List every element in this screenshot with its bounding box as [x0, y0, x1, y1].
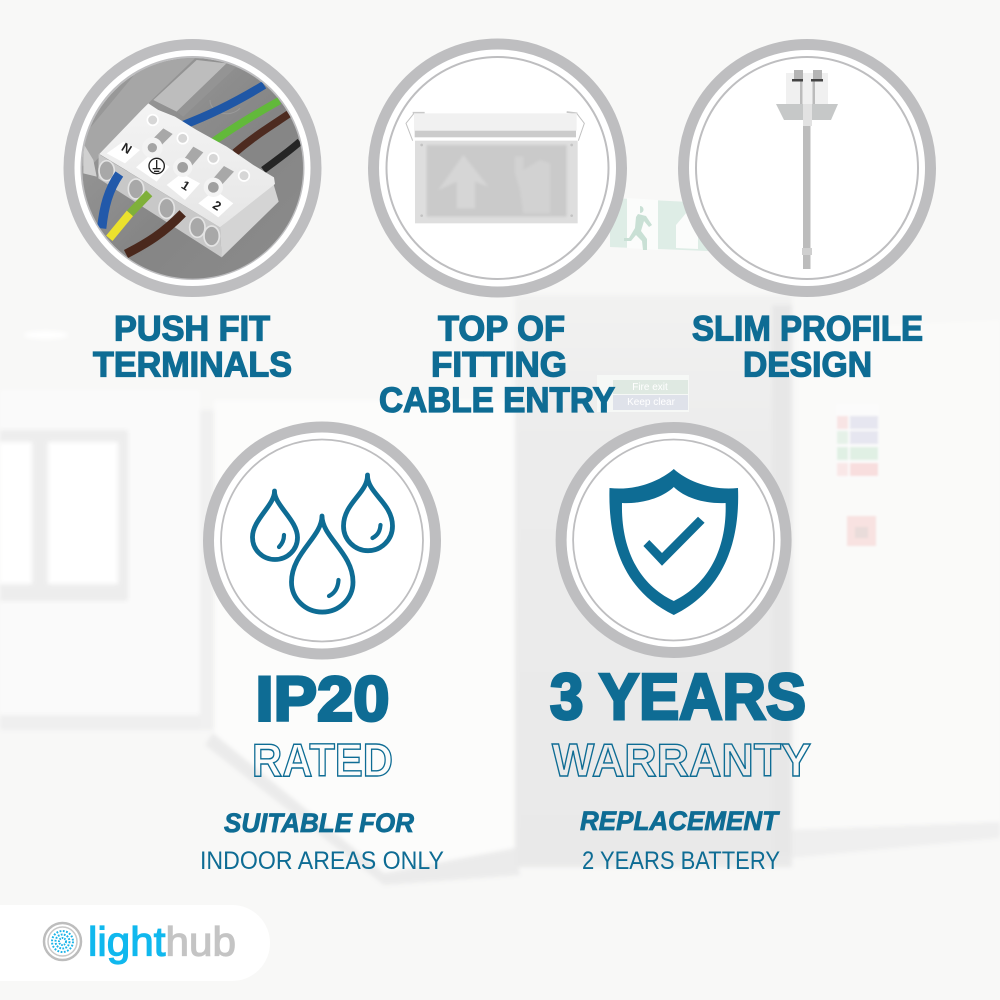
stat: IP20: IP20: [256, 664, 390, 734]
stat: 3 years: 3 YEARS: [550, 660, 806, 733]
panel: warranty: [561, 428, 786, 652]
circle frame: [69, 44, 316, 292]
logo panel: lighthub: [0, 905, 270, 981]
heading: slim profile design: DESIGN: [743, 346, 872, 384]
background exit sign: [610, 198, 730, 252]
terminal block: [98, 154, 222, 257]
heading: push fit terminals: TERMINALS: [93, 346, 292, 384]
background fire exit sign: [597, 375, 689, 412]
heading: top of fitting cable entry: FITTING: [431, 346, 567, 384]
photo: terminal block with wires: [80, 57, 307, 280]
heading: top of fitting cable entry: CABLE ENTRY: [379, 381, 615, 420]
panel: top cable entry: [374, 44, 622, 292]
heading: push fit terminals: [93, 310, 292, 384]
logo icon: [44, 923, 81, 960]
image: side view of fitting: [776, 70, 838, 269]
background fire exit sign: Keep clear: [627, 397, 676, 408]
panel: IP20 rating: [208, 427, 436, 654]
circle frame: [208, 427, 436, 654]
photo: terminal block with wires: 1: [179, 178, 192, 194]
icon: water drops: [252, 475, 392, 612]
label: rated: RATED: [252, 734, 393, 786]
text: replacement: REPLACEMENT: [580, 806, 780, 836]
panel: push fit terminals: [69, 44, 316, 292]
background fire alarm box: [847, 516, 876, 546]
background fire exit sign: Fire exit: [632, 382, 668, 393]
logo wordmark: lighthub: [88, 918, 236, 964]
background safety posters: [836, 404, 879, 478]
heading: slim profile design: [692, 310, 923, 384]
circle frame: [684, 44, 930, 292]
photo: terminal block with wires: N: [119, 140, 134, 157]
photo: terminal block with wires: 2: [210, 198, 223, 214]
text: 2 years battery: 2 YEARS BATTERY: [582, 847, 780, 875]
heading: push fit terminals: PUSH FIT: [114, 310, 270, 348]
circle frame: [374, 44, 622, 292]
icon: shield with check: [609, 469, 738, 615]
text: indoor areas only: INDOOR AREAS ONLY: [200, 847, 444, 875]
image: exit sign fitting: [406, 112, 584, 223]
label: warranty: WARRANTY: [552, 734, 811, 786]
heading: slim profile design: SLIM PROFILE: [692, 310, 923, 348]
heading: top of fitting cable entry: [379, 310, 615, 420]
panel: slim profile design: [684, 44, 930, 292]
circle frame: [561, 428, 786, 652]
front wires: [102, 174, 183, 254]
rear wires: [183, 85, 300, 170]
heading: top of fitting cable entry: TOP OF: [438, 310, 565, 348]
text: suitable for: SUITABLE FOR: [224, 808, 414, 838]
